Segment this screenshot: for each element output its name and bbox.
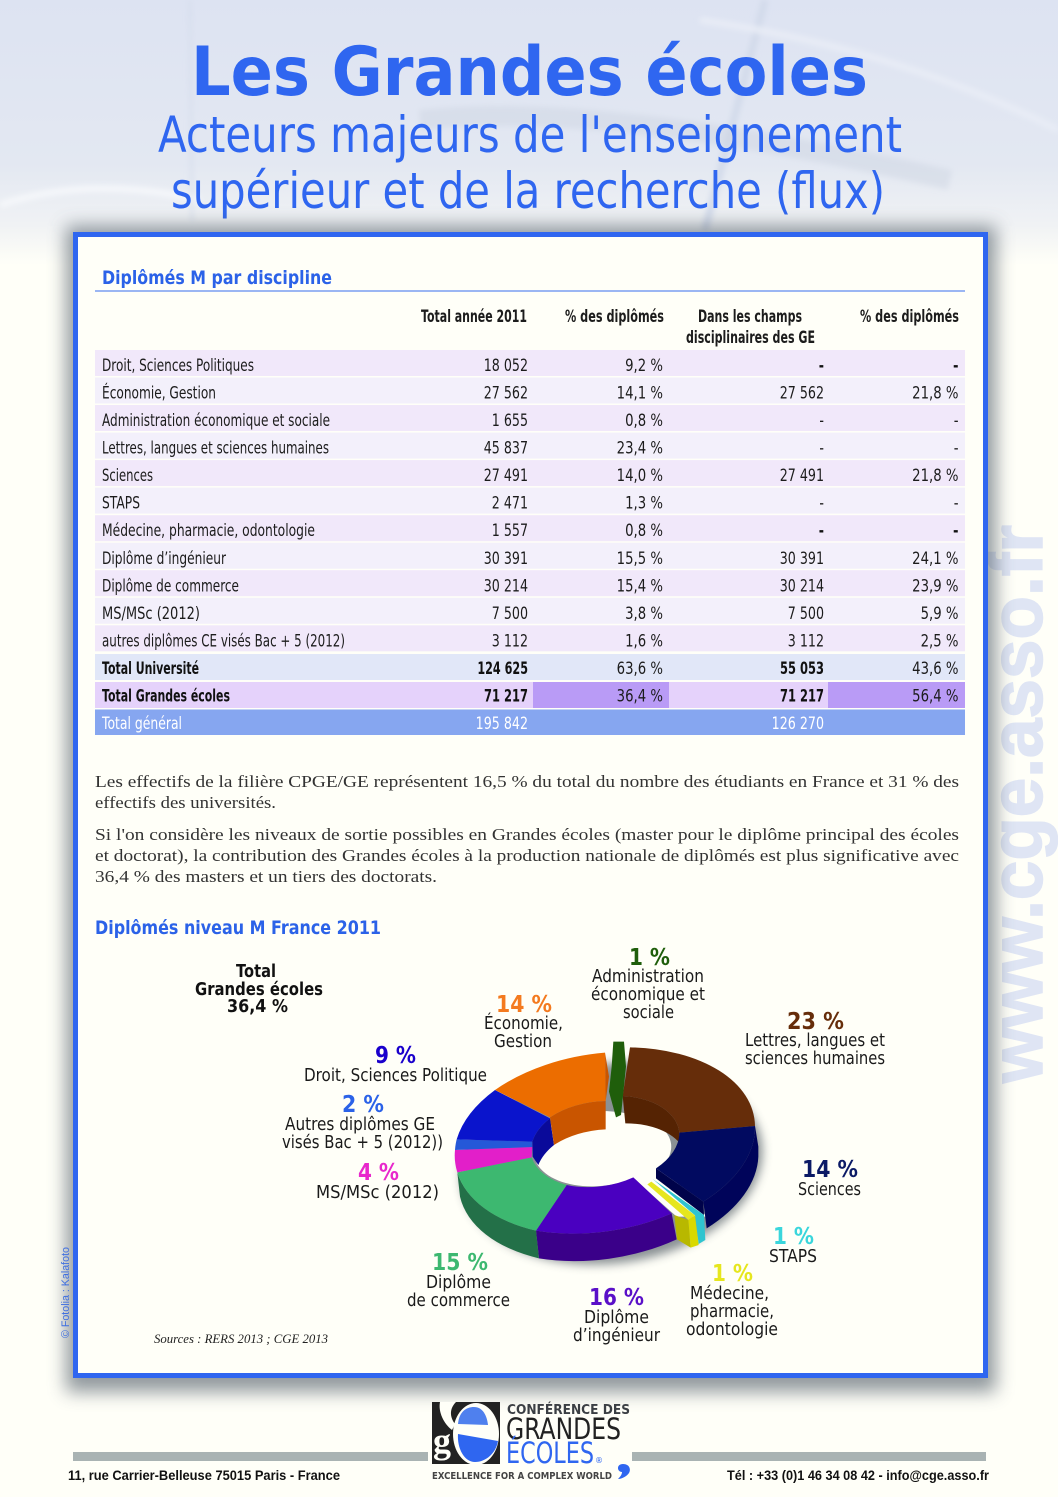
column: % des diplômés GE: 24,1 % — [912, 548, 958, 568]
row labels: Total Université — [102, 659, 199, 679]
column: total année 2011: 45 837 — [484, 438, 528, 458]
label: Autres diplômes — [282, 1092, 443, 1153]
logo wordmark: ® — [595, 1456, 603, 1465]
row labels: autres diplômes CE visés Bac + 5 (2012) — [102, 632, 345, 652]
label: Autres diplômes: 2 % — [342, 1092, 384, 1118]
label: Diplôme d'ingénieur — [573, 1285, 661, 1346]
panel shadow — [66, 226, 996, 1392]
slice: Sciences — [656, 1126, 758, 1228]
label: Diplôme de commerce: Diplôme — [426, 1273, 491, 1293]
label: Administration: Administration — [592, 967, 704, 987]
row labels: Lettres, langues et sciences humaines — [102, 438, 329, 458]
column: % des diplômés: 23,4 % — [617, 438, 663, 458]
table header: disciplinaires des GE — [686, 328, 815, 348]
footer contact: Tél : +33 (0)1 46 34 08 42 - info@cge.asso.fr — [727, 1467, 989, 1483]
row labels: STAPS — [102, 494, 140, 514]
column: champs disciplinaires des GE: 71 217 — [780, 686, 824, 706]
column: champs disciplinaires des GE: - — [819, 520, 824, 541]
donut chart — [448, 1042, 776, 1283]
footer address: 11, rue Carrier-Belleuse 75015 Paris - France — [68, 1467, 340, 1483]
column: total année 2011: 71 217 — [484, 686, 528, 706]
column: total année 2011: 18 052 — [484, 355, 528, 376]
column: champs disciplinaires des GE: - — [819, 493, 824, 513]
label: Droit — [304, 1043, 487, 1086]
column: % des diplômés: 9,2 % — [625, 355, 663, 375]
column: champs disciplinaires des GE — [772, 355, 824, 734]
column: total année 2011: 30 214 — [484, 576, 528, 596]
text block: commentary: Les effectifs de la filière CPGE/GE représentent 16,5 % du total du nombre des étudiants en France et 31 % des — [95, 772, 959, 791]
column: champs disciplinaires des GE: 30 391 — [780, 548, 824, 569]
column: total année 2011: 30 391 — [484, 548, 528, 569]
label: Administration: sociale — [623, 1003, 674, 1023]
column: champs disciplinaires des GE: 30 214 — [780, 576, 824, 596]
label: total Grandes écoles — [195, 961, 323, 1017]
column: % des diplômés: 36,4 % — [617, 686, 663, 706]
text block: commentary — [95, 772, 959, 886]
chart hole — [536, 1111, 707, 1217]
table header — [421, 307, 959, 348]
column: % des diplômés GE: - — [954, 493, 958, 513]
column: % des diplômés: 14,0 % — [617, 465, 663, 485]
label: total Grandes écoles: Total — [236, 961, 276, 982]
table header: % des diplômés — [565, 307, 664, 327]
label: Sciences: Sciences — [798, 1180, 861, 1200]
label: MS/MSc: MS/MSc (2012) — [316, 1183, 439, 1203]
column: champs disciplinaires des GE: 7 500 — [788, 603, 824, 624]
sources: Sources : RERS 2013 ; CGE 2013 — [154, 1331, 328, 1346]
label: Économie — [484, 992, 563, 1052]
label: Sciences — [798, 1157, 861, 1200]
column: champs disciplinaires des GE: 27 491 — [780, 465, 824, 486]
row labels: Administration économique et sociale — [102, 411, 330, 431]
slice: MS/MSc — [455, 1147, 532, 1172]
label: Économie: 14 % — [496, 992, 552, 1018]
label: MS/MSc — [316, 1160, 439, 1203]
column: % des diplômés GE: - — [953, 355, 958, 375]
chart labels — [195, 945, 885, 1346]
label: total Grandes écoles: 36,4 % — [227, 996, 288, 1017]
logo mark: g — [433, 1421, 451, 1461]
subtitle: supérieur et de la recherche (flux) — [171, 162, 885, 220]
label: MS/MSc: 4 % — [358, 1160, 399, 1186]
label: Lettres: Lettres, langues et — [745, 1031, 885, 1051]
label: Autres diplômes: visés Bac + 5 (2012)) — [282, 1133, 443, 1153]
label: Diplôme de commerce: 15 % — [432, 1250, 488, 1276]
label: total Grandes écoles: Grandes écoles — [195, 979, 323, 1000]
column: % des diplômés GE: - — [954, 438, 958, 458]
column: % des diplômés GE: - — [954, 410, 958, 430]
column: % des diplômés: 1,6 % — [625, 631, 663, 651]
page background — [0, 0, 1058, 265]
slice: Droit, Sciences Politique — [457, 1090, 554, 1165]
column: % des diplômés GE: 21,8 % — [912, 465, 958, 485]
table header: Total année 2011 — [421, 307, 527, 327]
column: % des diplômés GE — [912, 355, 958, 706]
slice: Administration économique et sociale — [609, 1042, 626, 1117]
slice: Lettres, langues et sciences humaines — [623, 1047, 755, 1143]
column: % des diplômés GE: - — [953, 520, 958, 540]
column: total année 2011: 1 557 — [492, 520, 528, 541]
label: Médecine: Médecine, — [690, 1284, 769, 1304]
column: total année 2011: 7 500 — [492, 603, 528, 624]
photo credit: © Fotolia : Kalafoto — [60, 1247, 72, 1338]
label: STAPS — [769, 1224, 817, 1267]
column: % des diplômés GE: 23,9 % — [912, 576, 958, 596]
row labels: Médecine, pharmacie, odontologie — [102, 521, 315, 541]
slice: Autres diplômes GE — [455, 1139, 532, 1150]
heading: diplômés M par discipline: Diplômés M par discipline — [102, 267, 332, 289]
column: champs disciplinaires des GE: - — [819, 438, 824, 458]
slice: Diplôme d'ingénieur — [536, 1177, 677, 1261]
column: champs disciplinaires des GE: - — [819, 355, 824, 376]
footer bars — [73, 1452, 986, 1461]
logo comma — [618, 1464, 630, 1479]
row backgrounds — [95, 350, 965, 735]
text block: commentary: 36,4 % des masters et un tiers des doctorats. — [95, 867, 437, 886]
row labels: Droit, Sciences Politiques — [102, 356, 254, 376]
label: Administration: 1 % — [629, 945, 670, 971]
label: Médecine: odontologie — [686, 1320, 778, 1340]
column: % des diplômés: 15,5 % — [617, 548, 663, 568]
label: Lettres — [745, 1009, 885, 1069]
column: % des diplômés GE: 5,9 % — [921, 603, 958, 623]
column: total année 2011: 3 112 — [492, 631, 528, 651]
column: % des diplômés: 3,8 % — [625, 603, 663, 623]
table — [95, 307, 965, 735]
label: Diplôme d'ingénieur: d’ingénieur — [573, 1326, 661, 1346]
subtitle — [158, 106, 902, 220]
column: % des diplômés GE: 21,8 % — [912, 383, 958, 403]
row labels: Total général — [101, 714, 182, 734]
label: Économie: Gestion — [494, 1032, 552, 1052]
title: Les Grandes écoles — [191, 33, 868, 112]
label: Économie: Économie, — [484, 1012, 563, 1034]
slice: STAPS — [653, 1179, 705, 1244]
text block: commentary: et doctorat), la contribution des Grandes écoles à la production nationale de diplômés est plus significative avec — [95, 846, 959, 865]
logo wordmark: ÉCOLES — [506, 1436, 594, 1470]
row labels: Diplôme d’ingénieur — [102, 549, 226, 569]
column: % des diplômés GE: 43,6 % — [912, 658, 958, 678]
label: Administration — [591, 945, 705, 1023]
column: total année 2011: 195 842 — [476, 713, 528, 734]
slice: Médecine, pharmacie, odontologie — [647, 1182, 699, 1248]
logo mark — [432, 1402, 500, 1465]
logo wordmark: GRANDES — [506, 1412, 621, 1446]
label: Lettres: 23 % — [787, 1009, 844, 1035]
column: % des diplômés GE: 56,4 % — [912, 686, 958, 706]
column: % des diplômés GE: 2,5 % — [921, 631, 958, 651]
column: champs disciplinaires des GE: 3 112 — [788, 631, 824, 651]
label: Diplôme d'ingénieur: Diplôme — [584, 1308, 649, 1328]
row labels — [101, 356, 345, 734]
logo wordmark — [432, 1402, 630, 1482]
column: % des diplômés: 14,1 % — [617, 383, 663, 403]
row labels: Sciences — [102, 466, 153, 486]
main panel — [76, 234, 986, 1376]
label: Droit: 9 % — [375, 1043, 416, 1069]
row labels: MS/MSc (2012) — [102, 604, 200, 624]
column: champs disciplinaires des GE: 126 270 — [772, 713, 824, 734]
label: Administration: économique et — [591, 985, 705, 1005]
table header: % des diplômés — [860, 307, 959, 327]
label: Médecine: 1 % — [712, 1261, 753, 1287]
column: champs disciplinaires des GE: 55 053 — [780, 658, 824, 679]
slice: Économie, Gestion — [495, 1053, 609, 1145]
column: total année 2011: 1 655 — [492, 410, 528, 431]
subtitle: Acteurs majeurs de l'enseignement — [158, 106, 902, 164]
column: total année 2011: 27 491 — [484, 465, 528, 486]
label: Médecine — [686, 1261, 778, 1340]
heading: diplômés niveau M: Diplômés niveau M France 2011 — [95, 917, 381, 939]
column: champs disciplinaires des GE: - — [819, 410, 824, 431]
column: total année 2011: 27 562 — [484, 383, 528, 403]
logo wordmark: EXCELLENCE FOR A COMPLEX WORLD — [432, 1471, 612, 1482]
logo — [432, 1402, 630, 1482]
column: % des diplômés: 0,8 % — [625, 410, 663, 430]
slice: Diplôme de commerce — [457, 1157, 567, 1258]
text block: commentary: effectifs des universités. — [95, 793, 276, 812]
row labels: Total Grandes écoles — [102, 686, 230, 706]
label: Autres diplômes: Autres diplômes GE — [285, 1115, 435, 1135]
column: total année 2011 — [476, 355, 528, 734]
label: STAPS: 1 % — [773, 1224, 814, 1250]
column: champs disciplinaires des GE: 27 562 — [780, 383, 824, 403]
label: Droit: Droit, Sciences Politique — [304, 1066, 487, 1086]
column: % des diplômés: 0,8 % — [625, 520, 663, 540]
column: total année 2011: 124 625 — [477, 658, 528, 679]
chart shadow — [448, 1043, 776, 1283]
label: Diplôme de commerce — [407, 1250, 510, 1311]
label: Diplôme de commerce: de commerce — [407, 1291, 510, 1311]
label: Sciences: 14 % — [802, 1157, 858, 1183]
label: Lettres: sciences humaines — [745, 1049, 885, 1069]
label: Médecine: pharmacie, — [690, 1302, 774, 1322]
row labels: Diplôme de commerce — [102, 576, 239, 596]
label: STAPS: STAPS — [769, 1247, 817, 1267]
column: % des diplômés: 15,4 % — [617, 576, 663, 596]
column: % des diplômés — [617, 355, 663, 706]
text block: commentary: Si l'on considère les niveaux de sortie possibles en Grandes écoles (master pour le diplôme principal des écoles — [95, 825, 959, 844]
column: total année 2011: 2 471 — [492, 493, 528, 513]
table header: Dans les champs — [698, 307, 802, 327]
website watermark: www.cge.asso.fr — [975, 525, 1058, 1084]
row labels: Économie, Gestion — [102, 382, 216, 404]
column: % des diplômés: 63,6 % — [617, 658, 663, 678]
logo wordmark: CONFÉRENCE DES — [507, 1402, 630, 1418]
label: Diplôme d'ingénieur: 16 % — [589, 1285, 644, 1311]
column: % des diplômés: 1,3 % — [625, 493, 663, 513]
